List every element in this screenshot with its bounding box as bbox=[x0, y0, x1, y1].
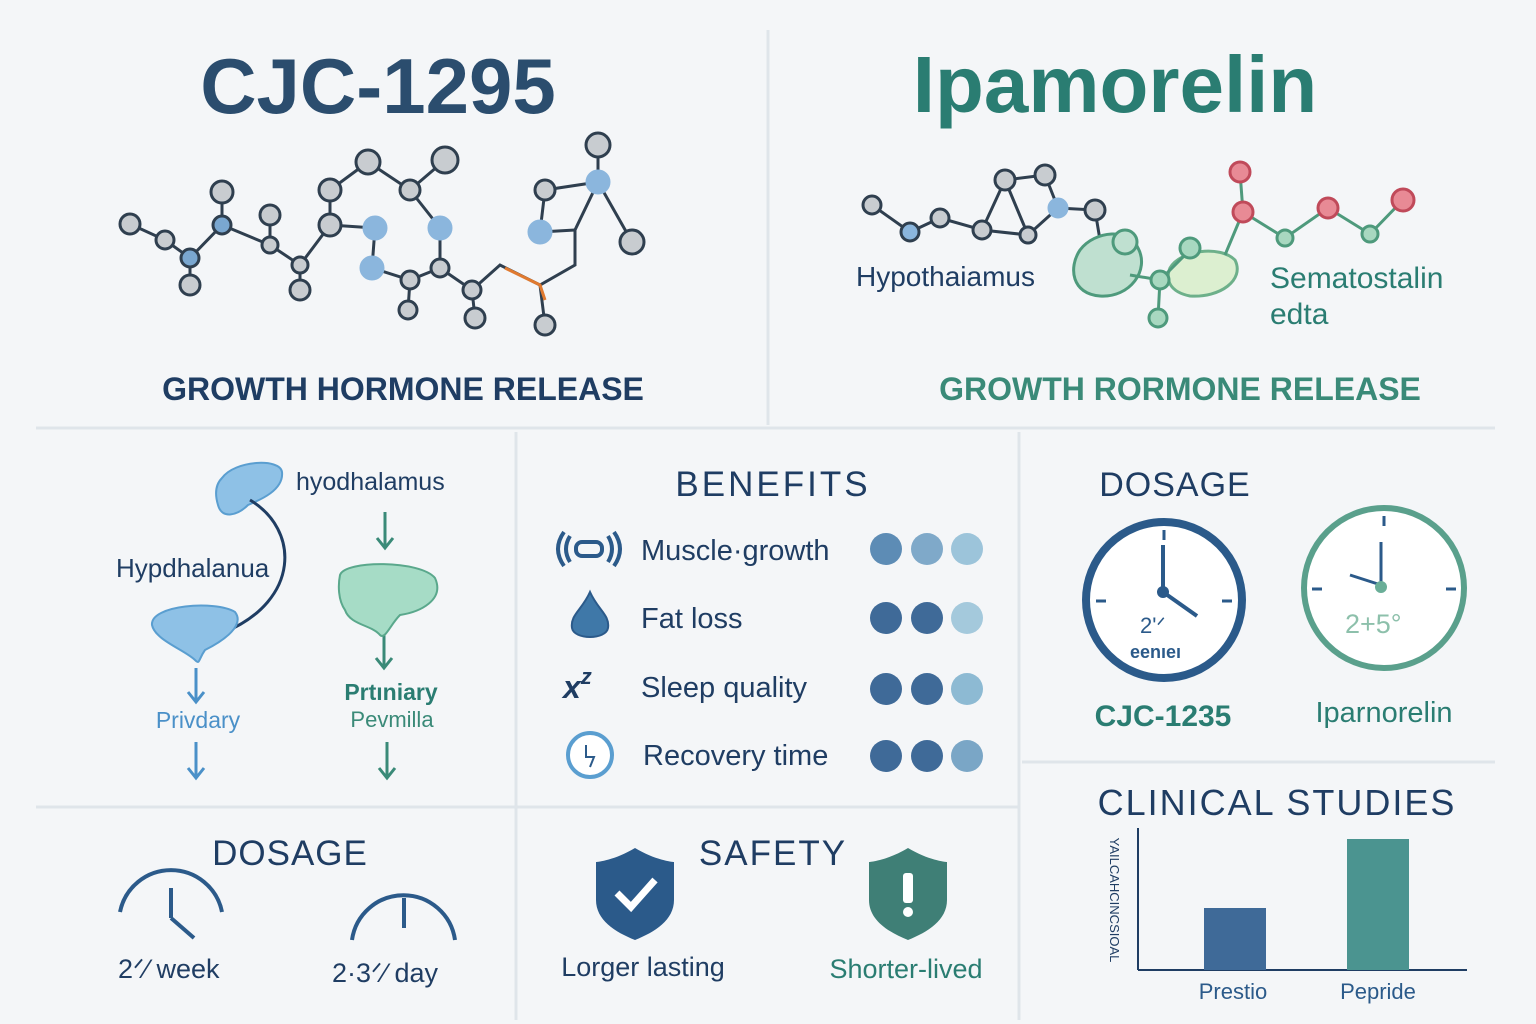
panel: dosage left: 2·3ᐟ⁄ day bbox=[332, 958, 438, 988]
panel: dosage left: DOSAGE bbox=[212, 834, 368, 873]
panel: pathway diagram: Privdary bbox=[156, 707, 241, 733]
clock: Ipamorelin: 2+5° bbox=[1345, 609, 1402, 639]
icon: x2: x bbox=[563, 669, 581, 705]
panel: dosage left bbox=[118, 834, 455, 988]
panel: clinical studies chart: CLINICAL STUDIES bbox=[1098, 782, 1456, 823]
clock: Ipamorelin bbox=[1304, 508, 1464, 668]
panel: safety: Lorger lasting bbox=[561, 952, 725, 982]
clock: CJC: 2'ᐟ bbox=[1140, 613, 1166, 638]
icon: drop bbox=[572, 592, 608, 637]
panel: safety: SAFETY bbox=[699, 834, 847, 873]
clock: CJC bbox=[1086, 522, 1242, 678]
panel: benefits: Muscle·growth bbox=[641, 535, 830, 567]
panel: dosage right: DOSAGE bbox=[1099, 466, 1251, 504]
panel: benefits: Sleep quality bbox=[641, 672, 808, 704]
panel: pathway diagram: hyodhalamus bbox=[296, 468, 445, 496]
icon: pituitary blob blue bbox=[152, 606, 238, 662]
panel: dosage right: CJC-1235 bbox=[1095, 700, 1231, 733]
icon: shield exclamation bbox=[869, 848, 947, 940]
molecule: Ipamorelin bbox=[863, 162, 1414, 327]
title: Ipamorelin: Ipamorelin bbox=[913, 40, 1317, 129]
panel: clinical studies chart bbox=[1098, 782, 1467, 1004]
title: CJC-1295: CJC-1295 bbox=[200, 42, 556, 130]
subtitle: CJC growth hormone release: GROWTH HORMONE RELEASE bbox=[162, 371, 644, 407]
panel: clinical studies chart: Pepride bbox=[1340, 979, 1416, 1004]
panel: benefits: Recovery time bbox=[643, 740, 828, 772]
label: Sematostalin edta: edta bbox=[1270, 298, 1329, 331]
icon: x2: z bbox=[580, 664, 592, 689]
icon: half clock 2 bbox=[352, 895, 455, 940]
icon: clock bbox=[568, 733, 612, 777]
icon: shield check bbox=[596, 848, 674, 940]
panel: benefits: BENEFITS bbox=[675, 465, 871, 504]
clock: CJC: eenıeı bbox=[1130, 642, 1181, 662]
icon: dumbbell bbox=[558, 532, 620, 566]
panel: benefits bbox=[558, 465, 983, 777]
molecule: CJC-1295 bbox=[120, 133, 644, 335]
arrows and pituitary blob green bbox=[376, 512, 395, 778]
panel: pathway diagram: Hypdhalanua bbox=[116, 553, 270, 583]
label: Hypothalamus: Hypothaiamus bbox=[856, 261, 1035, 292]
icon: half clock 1 bbox=[120, 870, 222, 938]
panel: pathway diagram: Pevmilla bbox=[350, 707, 434, 732]
panel: dosage left: 2ᐟ⁄ week bbox=[118, 954, 220, 984]
rating dots bbox=[870, 533, 983, 772]
panel: pathway diagram: Prtıniary bbox=[344, 679, 438, 705]
subtitle: Ipamorelin growth hormone release: GROWTH RORMONE RELEASE bbox=[939, 371, 1421, 407]
label: Sematostalin edta: Sematostalin bbox=[1270, 262, 1443, 295]
panel: pathway diagram bbox=[116, 463, 445, 778]
panel: dosage right: Iparnorelin bbox=[1315, 697, 1453, 729]
icon: hypothalamus blob blue bbox=[216, 463, 282, 514]
panel: dosage right bbox=[1086, 466, 1464, 733]
panel: safety bbox=[561, 834, 983, 984]
panel: clinical studies chart: YAILCAHCINCSIOAL bbox=[1107, 838, 1122, 962]
panel: benefits: Fat loss bbox=[641, 603, 743, 635]
panel: clinical studies chart: Prestio bbox=[1199, 979, 1267, 1004]
panel: safety: Shorter-lived bbox=[829, 954, 983, 984]
